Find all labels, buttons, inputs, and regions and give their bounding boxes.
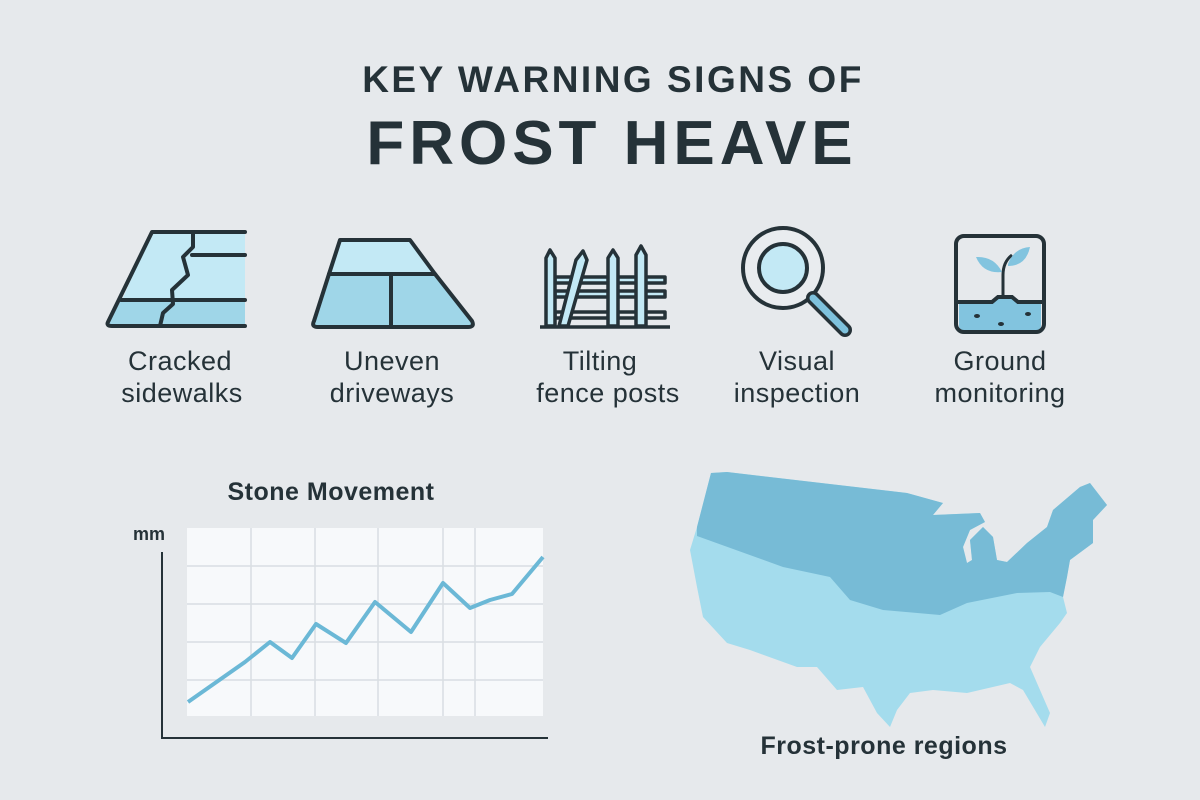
icon labels: monitoring: [934, 378, 1066, 408]
icon labels: fence posts: [536, 378, 680, 408]
title: [362, 59, 864, 178]
icon labels: sidewalks: [121, 378, 243, 408]
chart: stone movement: [133, 478, 548, 738]
icon labels: Uneven: [344, 346, 440, 376]
title: KEY WARNING SIGNS OF: [362, 59, 864, 100]
icon labels: [121, 346, 1066, 408]
icon labels: Tilting: [563, 346, 637, 376]
icon labels: Visual: [759, 346, 835, 376]
icon labels: Ground: [953, 346, 1047, 376]
map: frost-prone regions: Frost-prone regions: [760, 732, 1008, 760]
title: FROST HEAVE: [366, 109, 858, 178]
icon: tilting fence: [540, 246, 670, 327]
map: frost-prone regions: [690, 472, 1107, 760]
icon: cracked sidewalk: [108, 232, 245, 326]
icon labels: Cracked: [128, 346, 232, 376]
chart: stone movement: mm: [133, 524, 165, 544]
chart: stone movement: Stone Movement: [227, 478, 435, 506]
icon: uneven driveway: [313, 240, 473, 327]
icon labels: driveways: [330, 378, 454, 408]
icon: ground monitoring: [956, 236, 1044, 332]
icon: magnifier: [743, 228, 845, 330]
icon labels: inspection: [734, 378, 860, 408]
